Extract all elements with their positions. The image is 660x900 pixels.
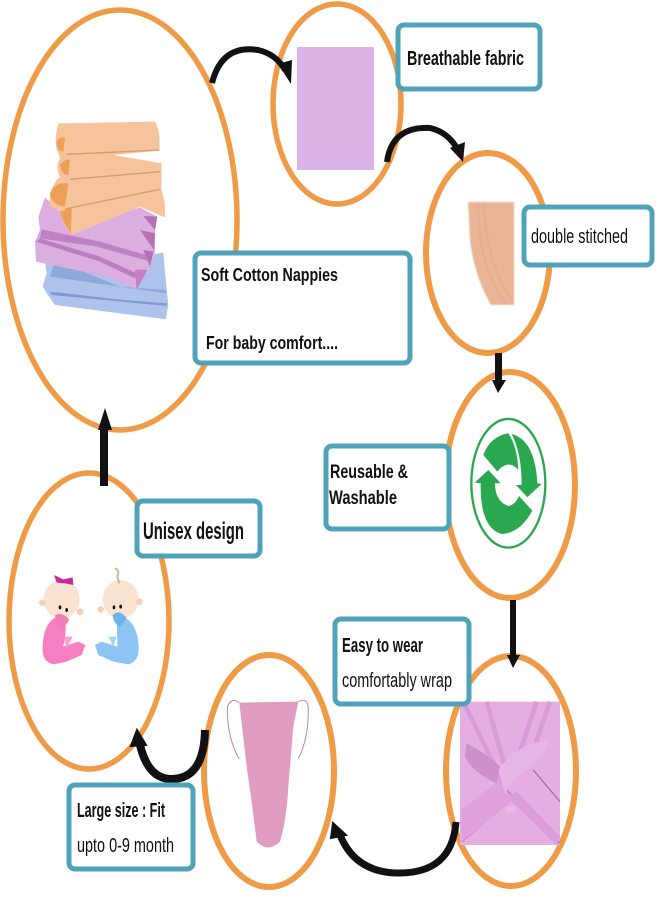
label: soft cotton nappies: For baby comfort.... bbox=[206, 333, 338, 353]
arrow: easy to wear to large size bbox=[331, 822, 456, 873]
image: pink long nappy with strings bbox=[227, 700, 308, 847]
label: reusable and washable: Reusable & bbox=[330, 462, 408, 483]
circle: breathable fabric bbox=[273, 4, 401, 204]
label: soft cotton nappies: Soft Cotton Nappies bbox=[201, 265, 338, 285]
circle: soft cotton nappies bbox=[3, 10, 237, 430]
circle: reusable bbox=[445, 372, 575, 598]
circle: double stitched bbox=[426, 153, 550, 353]
image: two baby illustrations bbox=[39, 568, 143, 664]
arrow: double stitched to reusable bbox=[492, 353, 506, 393]
arrow: reusable to easy to wear bbox=[507, 600, 520, 668]
image: stitched peach fabric edge bbox=[468, 202, 514, 305]
image: pink nappy tied with knot bbox=[460, 702, 560, 845]
label: double stitched bbox=[524, 207, 652, 265]
image: stack of folded nappies bbox=[35, 122, 168, 319]
circle: large size bbox=[204, 655, 334, 887]
icon: green recycling arrows bbox=[471, 419, 545, 548]
label: unisex design bbox=[137, 501, 260, 556]
label: soft cotton nappies bbox=[195, 253, 410, 363]
label: unisex design: Unisex design bbox=[143, 518, 244, 545]
arrow: breathable fabric to double stitched bbox=[387, 128, 465, 162]
label: easy to wear: comfortably wrap bbox=[342, 670, 452, 692]
label: reusable and washable: Washable bbox=[329, 488, 397, 509]
circle: unisex bbox=[9, 473, 169, 769]
label: reusable and washable bbox=[326, 446, 449, 529]
label: large size: Large size : Fit bbox=[77, 800, 165, 822]
label: large size bbox=[69, 785, 193, 869]
label: breathable fabric bbox=[398, 25, 540, 89]
arrow: nappies to breathable fabric bbox=[212, 49, 292, 84]
label: large size: upto 0-9 month bbox=[77, 835, 174, 857]
baby girl in pink bbox=[39, 575, 85, 664]
baby boy in blue bbox=[95, 568, 143, 664]
circle: easy to wear bbox=[446, 656, 576, 886]
label: breathable fabric: Breathable fabric bbox=[407, 48, 524, 70]
arrow: unisex to nappies bbox=[98, 408, 112, 486]
arrow: large size to unisex bbox=[131, 730, 205, 779]
label: easy to wear: Easy to wear bbox=[342, 635, 423, 657]
label: easy to wear bbox=[335, 619, 469, 704]
image: lilac fabric swatch bbox=[297, 47, 374, 170]
